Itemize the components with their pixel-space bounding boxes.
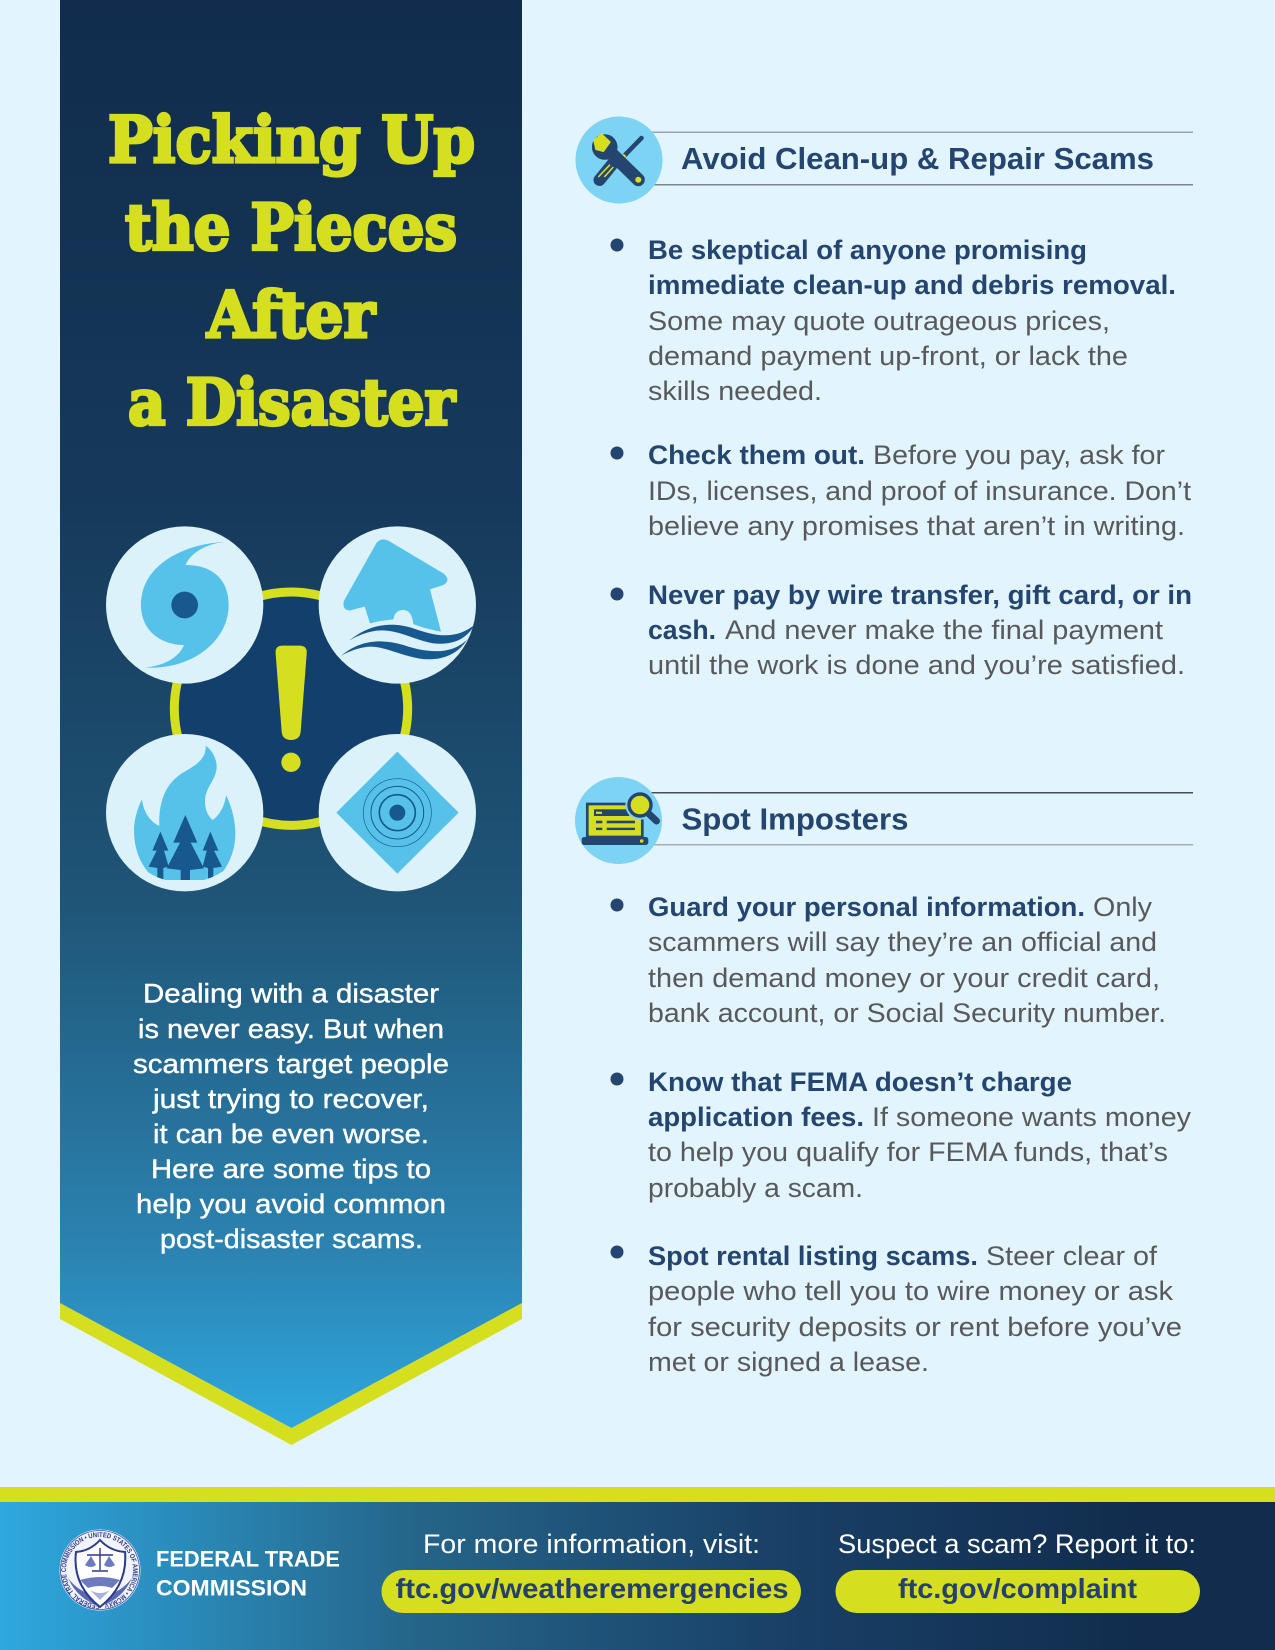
tip: never pay by wire: until the work is done and you’re satisfied. xyxy=(648,650,1185,680)
intro paragraph: post-disaster scams. xyxy=(160,1224,423,1254)
tip: FEMA: If someone wants money xyxy=(872,1102,1192,1132)
panel: spot imposters xyxy=(575,777,1193,1377)
tip: guard information xyxy=(610,892,1166,1028)
tip: FEMA: to help you qualify for FEMA funds, that’s xyxy=(648,1137,1168,1167)
tip: guard information: Guard your personal information. xyxy=(648,892,1085,922)
icon: exclamation mark xyxy=(276,646,307,772)
tip: guard information: scammers will say they’re an official and xyxy=(648,927,1157,957)
tip: never pay by wire xyxy=(610,580,1192,680)
title: the Pieces xyxy=(125,190,457,266)
tip: guard information: then demand money or your credit card, xyxy=(648,963,1160,993)
disaster icon cluster xyxy=(106,526,476,891)
tip: skeptical: skills needed. xyxy=(648,376,822,406)
tip: skeptical: immediate clean-up and debris removal. xyxy=(648,270,1176,300)
tip: rental listings xyxy=(610,1241,1182,1377)
intro paragraph: scammers target people xyxy=(133,1049,449,1079)
icon: hurricane xyxy=(106,526,263,684)
tip: skeptical: Some may quote outrageous prices, xyxy=(648,306,1110,336)
icon: FTC seal: FEDERAL TRADE COMMISSION • UNITED STATES OF AMERICA • MCMXV xyxy=(61,1532,138,1609)
info link callout: For more information, visit: xyxy=(423,1529,760,1559)
heading: imposters: Spot Imposters xyxy=(682,802,908,836)
report link callout xyxy=(836,1529,1200,1613)
tip: skeptical xyxy=(610,235,1176,406)
footer gradient xyxy=(0,1502,1275,1650)
tip: rental listings: Steer clear of xyxy=(986,1241,1158,1271)
tip: never pay by wire: Never pay by wire transfer, gift card, or in xyxy=(648,580,1192,610)
banner yellow chevron edge xyxy=(60,1303,522,1445)
central alert circle xyxy=(174,592,408,825)
tip: skeptical: Be skeptical of anyone promising xyxy=(648,235,1087,265)
title: a Disaster xyxy=(128,366,456,440)
intro paragraph: is never easy. But when xyxy=(138,1014,444,1044)
tip: guard information: Only xyxy=(1093,892,1153,922)
info link callout xyxy=(382,1529,801,1613)
title: After xyxy=(206,278,376,353)
panel: left banner xyxy=(60,0,522,1445)
tip: check them out: IDs, licenses, and proof of insurance. Don’t xyxy=(648,476,1192,506)
icon: wildfire xyxy=(106,734,263,891)
seal laurel xyxy=(68,1578,132,1606)
section header: clean-up xyxy=(576,116,1193,204)
footer xyxy=(0,1487,1275,1650)
tip: check them out xyxy=(610,440,1192,541)
panel: clean-up and repair scams xyxy=(576,116,1193,680)
banner gradient body xyxy=(60,0,522,1428)
title xyxy=(108,103,475,440)
intro paragraph: Here are some tips to xyxy=(151,1154,431,1184)
agency name: FEDERAL TRADE xyxy=(156,1546,340,1572)
heading: clean-up: Avoid Clean-up & Repair Scams xyxy=(681,141,1154,176)
info link callout: ftc.gov/weatheremergencies xyxy=(396,1573,788,1604)
report link callout: Suspect a scam? Report it to: xyxy=(838,1529,1196,1559)
tip: never pay by wire: cash. xyxy=(648,615,716,645)
tip: rental listings: Spot rental listing scams. xyxy=(648,1241,978,1271)
intro paragraph: Dealing with a disaster xyxy=(143,978,439,1008)
icon: laptop and magnifier xyxy=(575,777,662,864)
tip: skeptical: demand payment up-front, or lack the xyxy=(648,341,1128,371)
icon: flooded house xyxy=(319,526,476,684)
tip: rental listings: met or signed a lease. xyxy=(648,1347,929,1377)
footer yellow band xyxy=(0,1487,1275,1502)
tip: never pay by wire: And never make the final payment xyxy=(725,615,1164,645)
tip: guard information: bank account, or Social Security number. xyxy=(648,998,1166,1028)
agency name: COMMISSION xyxy=(156,1576,307,1600)
intro paragraph: help you avoid common xyxy=(136,1189,446,1219)
intro paragraph: just trying to recover, xyxy=(152,1084,429,1114)
tip: check them out: Before you pay, ask for xyxy=(873,440,1165,470)
tip: check them out: Check them out. xyxy=(648,440,865,470)
intro paragraph xyxy=(133,978,449,1254)
icon: earthquake xyxy=(319,734,476,891)
icon: wrench and screwdriver xyxy=(576,116,662,204)
tip: FEMA xyxy=(610,1067,1192,1203)
tip: FEMA: application fees. xyxy=(648,1102,864,1132)
intro paragraph: it can be even worse. xyxy=(153,1119,429,1149)
tip: FEMA: probably a scam. xyxy=(648,1173,863,1203)
agency name xyxy=(156,1546,340,1600)
tip: FEMA: Know that FEMA doesn’t charge xyxy=(648,1067,1072,1097)
tip: check them out: believe any promises that aren’t in writing. xyxy=(648,511,1185,541)
section header: imposters xyxy=(575,777,1193,864)
report link callout: ftc.gov/complaint xyxy=(898,1573,1137,1604)
title: Picking Up xyxy=(108,103,475,178)
tip: rental listings: for security deposits or rent before you’ve xyxy=(648,1312,1182,1342)
tip: rental listings: people who tell you to wire money or ask xyxy=(648,1276,1174,1306)
